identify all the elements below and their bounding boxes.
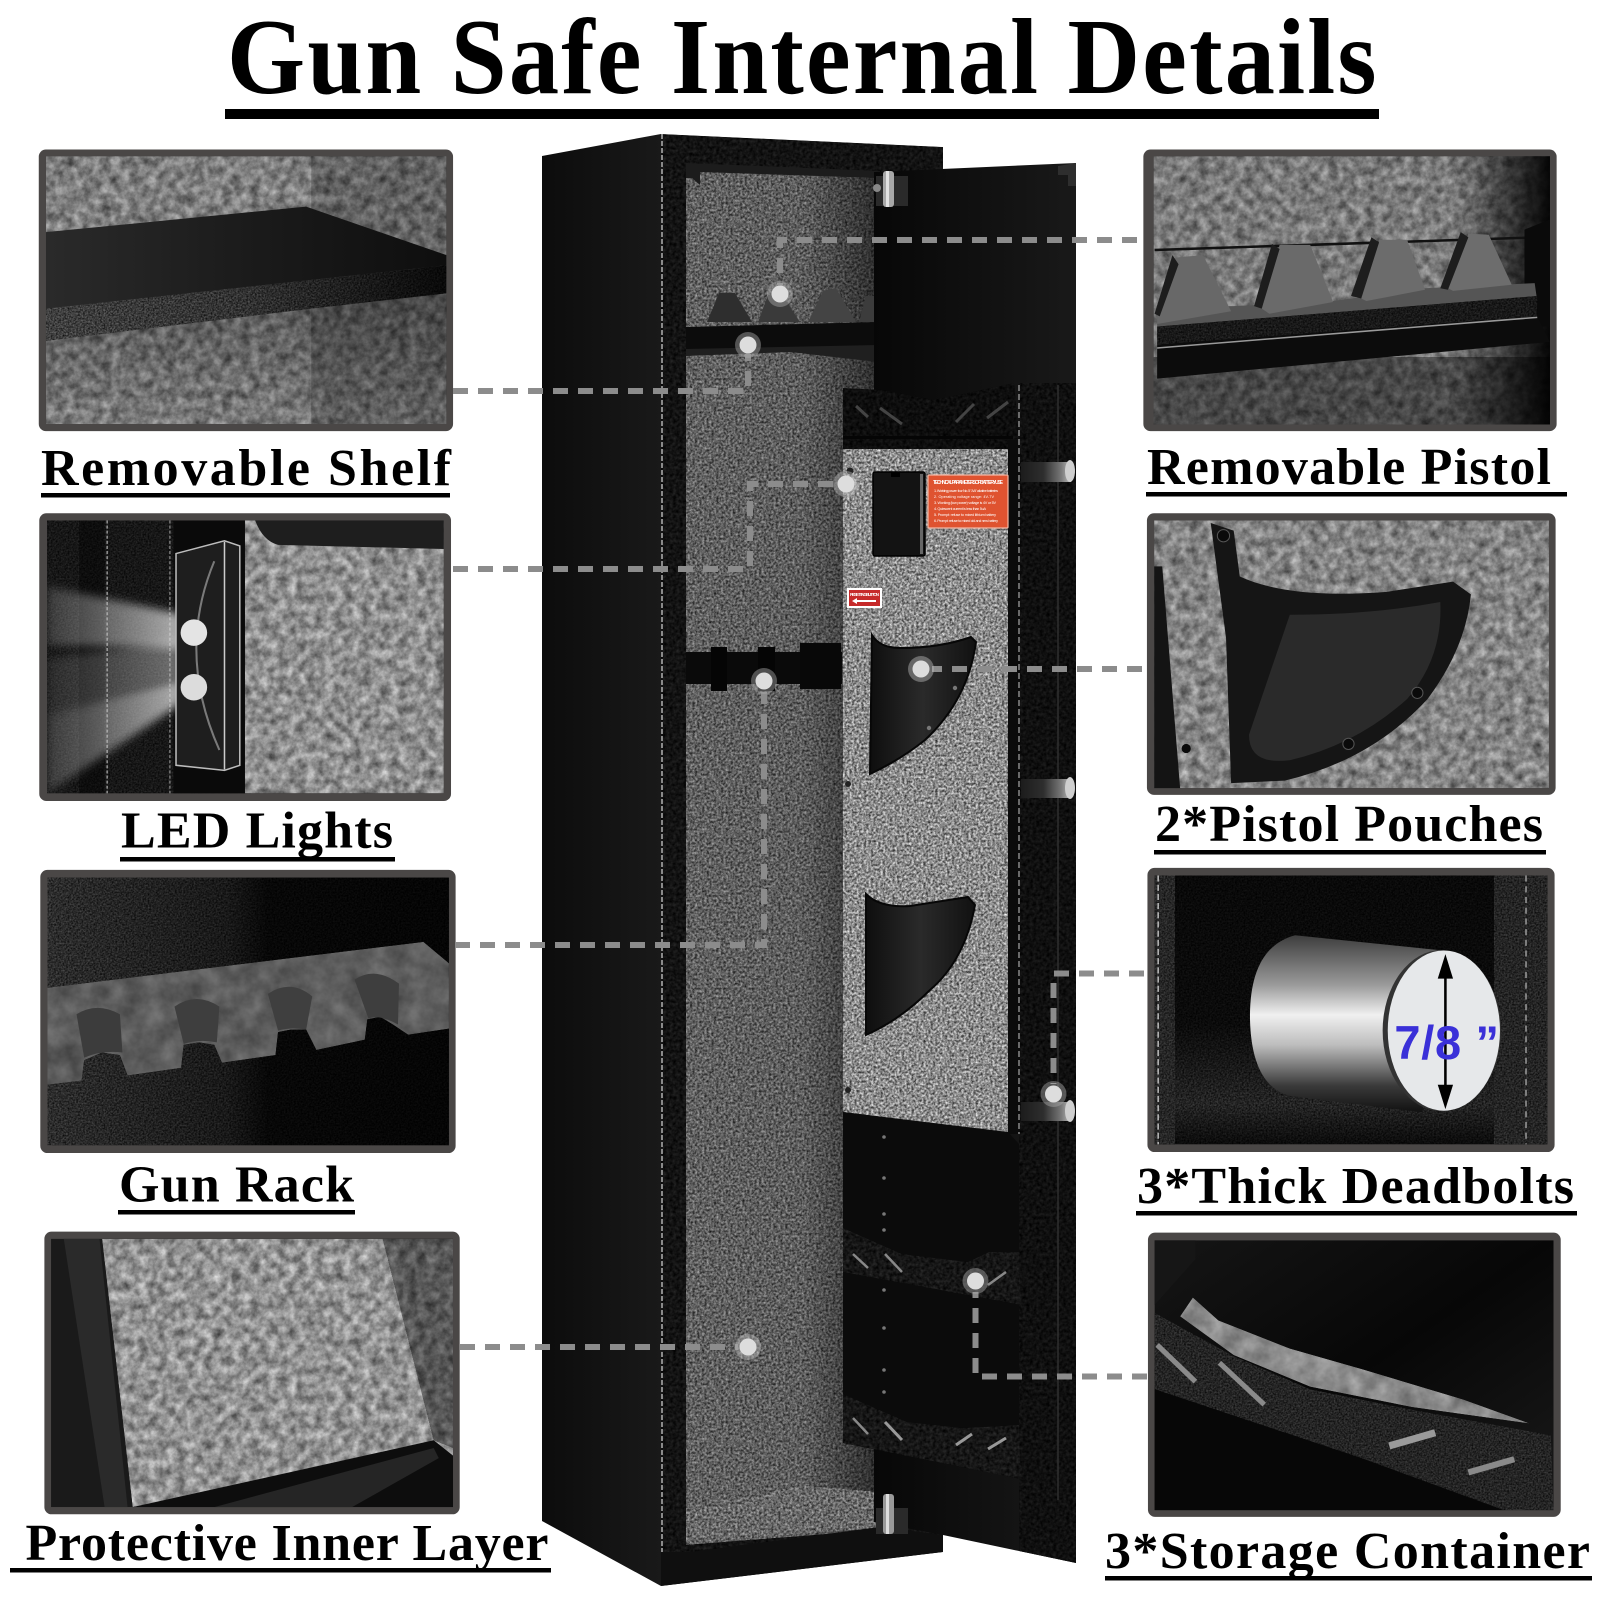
frame top lip — [686, 163, 880, 185]
battery warning sticker: 6. Prompt: refuse to mixed old and new battery — [934, 519, 998, 523]
battery warning sticker: 1. Working power: four No. 5 "AA" alkaline batteries — [934, 489, 998, 493]
panel: thick deadbolts photo — [1147, 868, 1555, 1152]
mid gun rack in safe — [686, 643, 842, 691]
battery warning sticker: 3. Working (low power) voltage is 4V or 5V — [934, 501, 996, 505]
panel: protective inner layer photo — [44, 1232, 460, 1514]
storage holes — [882, 1135, 886, 1394]
organizer metal rail — [1008, 385, 1020, 1134]
storage bracket lower — [843, 1394, 1021, 1479]
battery warning sticker: TECHNICAL PARAMETERS OF BATTERY USE — [933, 480, 1004, 486]
panel: thick deadbolts photo: 7/8 ” — [1394, 1017, 1499, 1069]
felt rivets — [845, 468, 854, 1093]
frame edge highlight — [661, 134, 663, 1586]
pistol pouch lower — [866, 894, 975, 1035]
gun safe body — [542, 134, 1076, 1586]
label: protective inner layer: Protective Inner Layer — [26, 1515, 548, 1572]
connector: gun rack — [455, 668, 777, 945]
deadbolt bottom — [1021, 1100, 1075, 1122]
title: Gun Safe Internal Details — [227, 0, 1376, 117]
frame bottom lip — [661, 1527, 943, 1586]
storage section — [843, 1112, 1019, 1478]
battery warning sticker: 5. Prompt: refuse to mixed lithium battery — [934, 513, 996, 517]
deadbolt middle — [1021, 777, 1075, 799]
door hinge bottom — [876, 1494, 908, 1534]
panel: LED lights photo — [39, 513, 451, 801]
safe left side panel — [542, 134, 661, 1586]
reset button sticker: RESETTING BUTTON — [850, 592, 879, 597]
battery warning sticker: 2. Operating voltage range: 4V-7V — [934, 495, 994, 499]
label: thick deadbolts: 3*Thick Deadbolts — [1137, 1158, 1574, 1215]
door side strip — [1019, 383, 1076, 1563]
label: removable shelf: Removable Shelf — [41, 440, 452, 497]
door hinge top — [873, 171, 908, 207]
connector: removable shelf — [453, 332, 761, 391]
door top corner bracket — [1058, 163, 1076, 186]
connector: pistol pouches — [908, 656, 1142, 682]
safe front frame — [661, 134, 943, 1586]
battery warning sticker: 4. Quiescent current is less than 5uA — [934, 507, 986, 511]
battery box — [873, 472, 925, 556]
connector: thick deadbolts — [1040, 974, 1144, 1107]
pistol pouch upper — [870, 635, 976, 774]
battery warning sticker — [928, 475, 1008, 528]
felt back wall — [686, 170, 880, 1545]
organizer felt panel — [843, 449, 1008, 1133]
panel: storage container photo — [1148, 1233, 1561, 1517]
label: removable pistol: Removable Pistol — [1147, 439, 1551, 496]
label: gun rack: Gun Rack — [119, 1156, 354, 1214]
label: storage container: 3*Storage Container — [1105, 1523, 1590, 1580]
panel: removable shelf photo — [39, 149, 453, 431]
storage bracket upper — [843, 1228, 1021, 1305]
organizer top bracket — [843, 383, 1019, 449]
reset button sticker — [847, 588, 882, 608]
top pistol rack in safe — [686, 288, 878, 362]
panel: gun rack photo — [40, 870, 456, 1153]
door bottom corner bracket — [1060, 1536, 1076, 1561]
label: pistol pouches: 2*Pistol Pouches — [1155, 796, 1543, 853]
deadbolt top — [1021, 460, 1075, 482]
connector: LED lights — [453, 471, 859, 569]
open door — [874, 163, 1076, 1563]
label: LED lights: LED Lights — [121, 802, 393, 860]
connector: protective inner layer — [460, 1334, 761, 1360]
panel: removable pistol rack photo — [1143, 149, 1557, 431]
connector: storage container — [962, 1268, 1147, 1376]
felt floor — [686, 1485, 880, 1545]
connector: removable pistol — [767, 240, 1137, 307]
panel: pistol pouches photo — [1147, 513, 1556, 795]
